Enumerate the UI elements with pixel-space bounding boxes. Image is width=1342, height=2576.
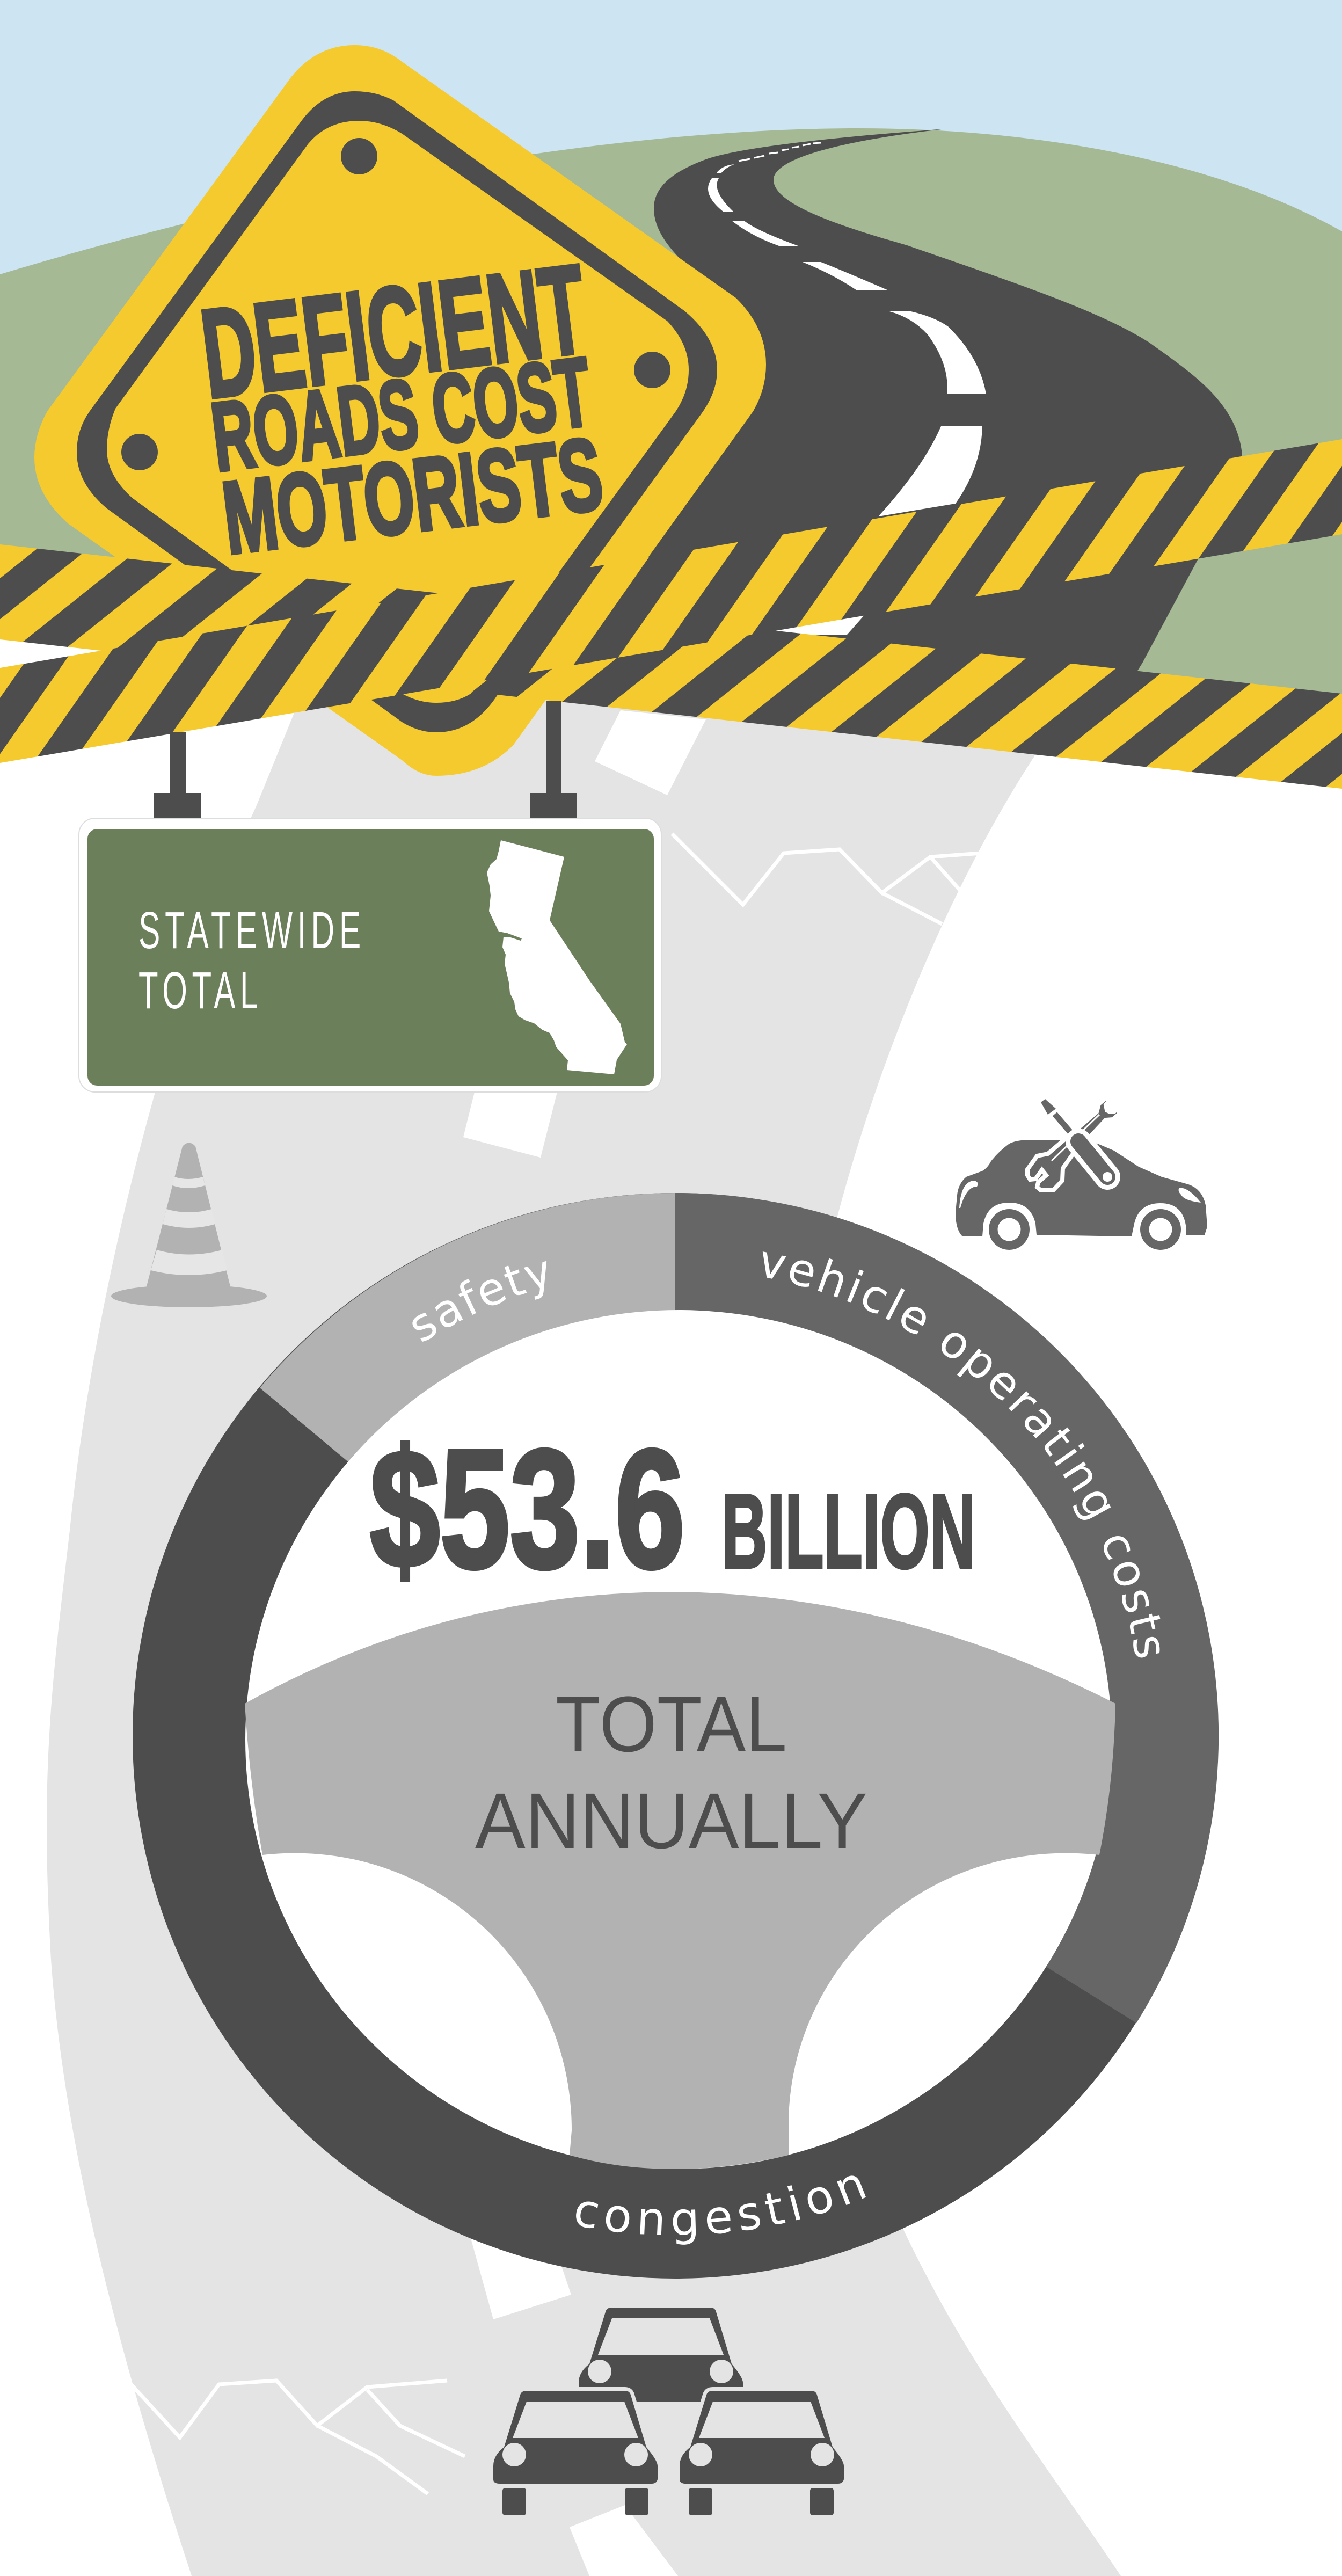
title: ROADS COST — [206, 338, 596, 492]
icon: traffic of three cars — [493, 2308, 844, 2515]
segment: safety — [260, 1193, 675, 1736]
total annually text — [475, 1680, 867, 1865]
back car — [579, 2308, 743, 2402]
label: safety: safety — [412, 1261, 546, 1342]
total annually text: TOTAL — [556, 1680, 787, 1769]
title: DEFICIENT — [194, 238, 593, 425]
sign posts — [154, 701, 577, 818]
barricade band: front — [0, 439, 1342, 763]
highway sign: statewide total — [79, 818, 661, 1092]
icon: car with crossed tools — [956, 1099, 1207, 1250]
icon: California map — [487, 840, 627, 1074]
headline amount: BILLION — [721, 1472, 975, 1590]
title — [194, 238, 608, 576]
steering wheel chart — [133, 1193, 1219, 2279]
front left car — [493, 2391, 658, 2515]
total annually text: ANNUALLY — [475, 1777, 867, 1865]
front right car — [680, 2391, 844, 2515]
cracks: lower left of highway — [127, 2379, 465, 2494]
label: vehicle operating costs: vehicle operating costs — [762, 1251, 1161, 1658]
segment: vehicle operating costs — [675, 1193, 1219, 2023]
headline amount — [370, 1415, 975, 1603]
sign bolt holes — [121, 138, 670, 470]
diamond warning sign — [34, 45, 766, 776]
icon: traffic cone — [111, 1143, 267, 1307]
steering wheel hub — [245, 1592, 1115, 2169]
label: congestion: congestion — [576, 2175, 866, 2245]
cracks: upper right of highway — [672, 834, 981, 924]
ground: grey curved highway — [47, 644, 1121, 2576]
sign text: TOTAL — [138, 961, 262, 1020]
winding road on the hill — [537, 129, 1242, 687]
sign text: STATEWIDE — [138, 901, 366, 959]
green hill — [0, 128, 1342, 698]
barricade band: back — [0, 544, 1342, 789]
headline amount: $53.6 — [370, 1415, 685, 1603]
icon: wrench — [1027, 1099, 1119, 1190]
title: MOTORISTS — [217, 417, 608, 576]
sign text — [138, 901, 366, 1020]
icon: screwdriver — [1041, 1099, 1071, 1133]
sky — [0, 0, 1342, 591]
